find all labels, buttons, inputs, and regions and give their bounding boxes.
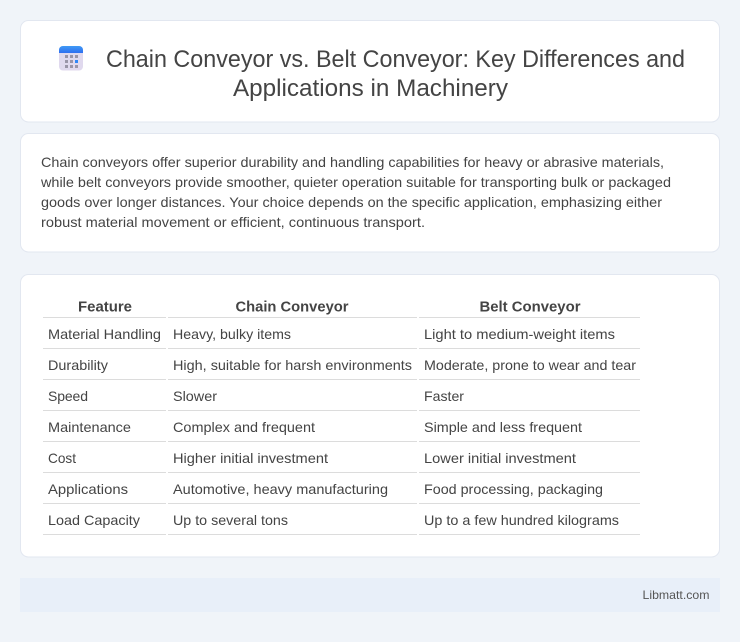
table row: applications: Applications (48, 481, 128, 497)
table row: load capacity: Load Capacity (48, 512, 140, 528)
title: Applications in Machinery (233, 75, 508, 102)
table row: cost: Lower initial investment (424, 450, 576, 466)
table row: load capacity (48, 512, 619, 528)
table header: Feature (78, 300, 132, 316)
table row: durability: Moderate, prone to wear and tear (424, 357, 636, 373)
panel: footer (20, 578, 720, 612)
summary text: while belt conveyors provide smoother, quieter operation suitable for transporting bulk or packaged (40, 174, 671, 190)
table row: cost: Cost (48, 450, 76, 466)
table header: Chain Conveyor (236, 300, 349, 316)
summary text: goods over longer distances. Your choice depends on the specific application, emphasizing either (41, 194, 662, 210)
panel: comparison table card (20, 274, 720, 557)
title (106, 46, 685, 102)
table row: speed (48, 388, 464, 404)
table row: cost: Higher initial investment (173, 450, 328, 466)
summary text: Chain conveyors offer superior durability and handling capabilities for heavy or abrasive materials, (41, 154, 664, 170)
table header (78, 300, 581, 316)
table row: maintenance: Simple and less frequent (424, 419, 582, 435)
table row: durability: High, suitable for harsh environments (173, 357, 412, 373)
table row: applications: Food processing, packaging (424, 481, 603, 497)
table row: speed: Slower (173, 388, 217, 404)
table row: applications (48, 481, 603, 497)
footer credit: Libmatt.com (642, 588, 710, 602)
icon: calendar (59, 46, 83, 70)
table row: material handling: Light to medium-weight items (424, 326, 615, 342)
table row: maintenance: Complex and frequent (173, 419, 315, 435)
table row: material handling (48, 326, 615, 342)
table row: load capacity: Up to several tons (173, 512, 288, 528)
table row: speed: Speed (48, 388, 88, 404)
table row: cost (48, 450, 576, 466)
table row: material handling: Heavy, bulky items (173, 326, 291, 342)
table rules (43, 318, 640, 534)
summary text: robust material movement or efficient, continuous transport. (41, 214, 425, 230)
table row: material handling: Material Handling (48, 326, 161, 342)
title: Chain Conveyor vs. Belt Conveyor: Key Differences and (106, 46, 685, 73)
table row: durability: Durability (48, 357, 108, 373)
table row: maintenance (48, 419, 582, 435)
table row: applications: Automotive, heavy manufacturing (173, 481, 388, 497)
table row: load capacity: Up to a few hundred kilograms (424, 512, 619, 528)
table row: maintenance: Maintenance (48, 419, 131, 435)
table row: durability (48, 357, 636, 373)
table row: speed: Faster (424, 388, 464, 404)
summary text (40, 154, 671, 230)
panel: title card (20, 20, 720, 122)
table header: Belt Conveyor (480, 300, 581, 316)
panel: summary card (20, 134, 720, 252)
